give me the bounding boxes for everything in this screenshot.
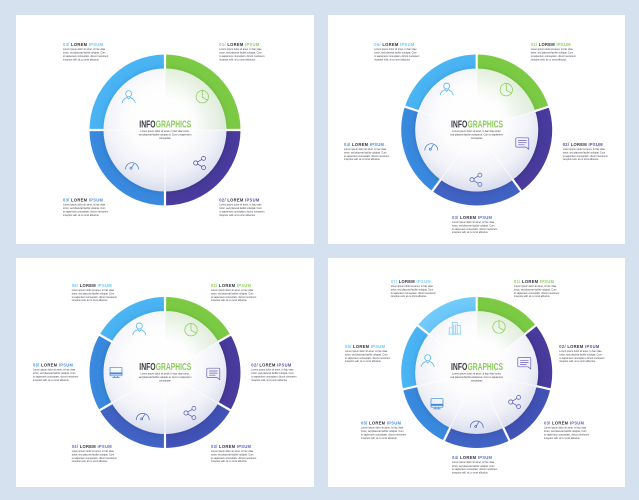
label 07: 07/ LOREM IPSUM	[391, 279, 431, 284]
label 02: inceptos velit, at cu omni albucius.	[559, 360, 596, 363]
label 06: to sapientem conceptam, dicunt mentorem	[345, 357, 390, 360]
label 03	[63, 198, 108, 217]
label 02: tortor, sed placerat facilisi volutpat. Cum	[563, 151, 605, 154]
label 01: 01/ LOREM IPSUM	[514, 279, 555, 284]
label 01: to sapientem conceptam, dicunt mentorem	[219, 55, 264, 58]
label 02: Lorem ipsum dolor sit amet, in hac vitae	[251, 368, 294, 372]
label 04: 04/ LOREM IPSUM	[63, 42, 104, 47]
label 06: Lorem ipsum dolor sit amet, in hac vitae	[345, 350, 388, 353]
label 02	[559, 344, 604, 363]
center title: INFO	[451, 362, 467, 373]
center description: sed placerat facilisi volutpat at. Cum to sapientem	[450, 376, 503, 379]
label 03: Lorem ipsum dolor sit amet, in hac vitae	[544, 426, 587, 430]
icon: share	[184, 406, 196, 420]
label 03: Lorem ipsum dolor sit amet, in hac vitae	[452, 221, 495, 224]
icon: share	[509, 395, 521, 409]
center description: Lorem ipsum dolor sit amet, in hac vitae tortor,	[452, 373, 502, 376]
label 03	[452, 215, 497, 234]
label 07: to sapientem conceptam, dicunt mentorem	[391, 292, 436, 295]
label 06: 06/ LOREM IPSUM	[345, 344, 386, 349]
label 03: to sapientem conceptam, dicunt mentorem	[544, 434, 589, 436]
label 04: 04/ LOREM IPSUM	[344, 142, 385, 147]
label 03: tortor, sed placerat facilisi volutpat. Cum	[452, 224, 494, 227]
label 05: 05/ LOREM IPSUM	[361, 420, 402, 426]
label 05	[33, 362, 78, 382]
label 02	[563, 142, 608, 161]
label 01: to sapientem conceptam, dicunt mentorem	[531, 55, 576, 58]
label 05: inceptos velit, at cu omni albucius.	[374, 58, 411, 61]
circle chart: five segments	[374, 38, 571, 233]
label 07: Lorem ipsum dolor sit amet, in hac vitae	[391, 285, 434, 288]
center description	[139, 130, 191, 140]
center title	[451, 119, 503, 130]
label 03: tortor, sed placerat facilisi volutpat. Cum	[544, 430, 586, 433]
label 02: 02/ LOREM IPSUM	[219, 198, 260, 202]
label 04: to sapientem conceptam, dicunt mentorem	[72, 457, 117, 460]
center description: conceptam	[471, 137, 483, 140]
label 04: Lorem ipsum dolor sit amet, in hac vitae	[72, 450, 115, 453]
label 03: Lorem ipsum dolor sit amet, in hac vitae	[211, 450, 254, 453]
icon: user	[421, 355, 434, 367]
icon: gauge	[126, 163, 138, 169]
icon: user	[133, 323, 146, 335]
label 05: to sapientem conceptam, dicunt mentorem	[374, 55, 419, 58]
label 05: Lorem ipsum dolor sit amet, in hac vitae	[33, 368, 76, 372]
icon: pie chart	[196, 90, 208, 103]
label 02: 02/ LOREM IPSUM	[563, 142, 603, 147]
label 03: 03/ LOREM IPSUM	[452, 215, 493, 220]
panel: seven-segment chart	[328, 258, 625, 487]
label 04: to sapientem conceptam, dicunt mentorem	[63, 55, 108, 58]
label 04: to sapientem conceptam, dicunt mentorem	[452, 468, 497, 471]
icon: chat bubble	[207, 368, 220, 380]
label 03: 03/ LOREM IPSUM	[211, 444, 252, 449]
center description: Lorem ipsum dolor sit amet, in hac vitae tortor,	[452, 130, 502, 133]
label 03	[544, 420, 589, 440]
icon: chat bubble	[518, 358, 531, 369]
label 04: to sapientem conceptam, dicunt mentorem	[344, 155, 389, 158]
label 06: to sapientem conceptam, dicunt mentorem	[72, 296, 117, 299]
icon: pie chart	[493, 321, 505, 333]
label 01	[531, 42, 576, 61]
label 03: tortor, sed placerat facilisi volutpat. Cum	[63, 207, 105, 210]
center title: GRAPHICS	[468, 362, 503, 373]
label 05: to sapientem conceptam, dicunt mentorem	[33, 376, 78, 378]
label 06: inceptos velit, at cu omni albucius.	[345, 360, 382, 363]
label 07: tortor, sed placerat facilisi volutpat. Cum	[391, 288, 433, 291]
label 01: tortor, sed placerat facilisi volutpat. Cum	[531, 52, 573, 55]
label 05: Lorem ipsum dolor sit amet, in hac vitae	[374, 48, 417, 51]
center description: Lorem ipsum dolor sit amet, in hac vitae tortor,	[140, 373, 190, 376]
label 05	[374, 42, 419, 61]
label 03: inceptos velit, at cu omni albucius.	[452, 231, 489, 234]
icon: monitor	[431, 399, 443, 409]
center description: sed placerat facilisi volutpat at. Cum to sapientem	[450, 134, 503, 136]
label 03: to sapientem conceptam, dicunt mentorem	[211, 457, 256, 460]
label 04: Lorem ipsum dolor sit amet, in hac vitae	[452, 461, 495, 464]
circle chart: four segments	[88, 53, 242, 207]
label 06: Lorem ipsum dolor sit amet, in hac vitae	[72, 289, 115, 292]
label 01: tortor, sed placerat facilisi volutpat. Cum	[211, 292, 253, 295]
label 03: tortor, sed placerat facilisi volutpat. Cum	[211, 453, 253, 456]
label 05: to sapientem conceptam, dicunt mentorem	[361, 434, 406, 436]
label 05: inceptos velit, at cu omni albucius.	[361, 437, 398, 440]
panel: four-segment chart	[16, 15, 314, 244]
center title: INFO	[451, 119, 467, 130]
label 03: inceptos velit, at cu omni albucius.	[544, 437, 581, 440]
label 06: inceptos velit, at cu omni albucius.	[72, 299, 108, 302]
label 01: Lorem ipsum dolor sit amet, in hac vitae	[514, 285, 557, 288]
label 02: tortor, sed placerat facilisi volutpat. Cum	[251, 372, 294, 375]
label 06: tortor, sed placerat facilisi volutpat. Cum	[72, 292, 114, 295]
label 01: Lorem ipsum dolor sit amet, in hac vitae	[219, 48, 262, 51]
icon: user	[440, 83, 453, 95]
label 04: tortor, sed placerat facilisi volutpat. Cum	[63, 52, 105, 55]
icon: user	[122, 91, 135, 103]
label 03: 03/ LOREM IPSUM	[544, 420, 585, 426]
circle chart: seven segments	[390, 279, 573, 466]
center description: conceptam	[159, 137, 171, 140]
center description: sed placerat facilisi volutpat at. Cum to sapientem	[139, 376, 191, 379]
label 02: 02/ LOREM IPSUM	[251, 362, 292, 368]
label 03: 03/ LOREM IPSUM	[63, 198, 104, 202]
label 01: to sapientem conceptam, dicunt mentorem	[514, 292, 559, 295]
label 04: 04/ LOREM IPSUM	[452, 455, 493, 460]
icon: share	[194, 156, 206, 170]
center description: conceptam	[159, 379, 171, 382]
label 02	[219, 198, 264, 217]
label 02: to sapientem conceptam, dicunt mentorem	[563, 155, 608, 158]
label 06	[345, 344, 390, 363]
circle chart: six segments	[67, 278, 263, 467]
label 01: 01/ LOREM IPSUM	[211, 283, 252, 288]
label 01: inceptos velit, at cu omni albucius.	[514, 295, 551, 298]
label 02: Lorem ipsum dolor sit amet, in hac vitae	[219, 204, 262, 206]
label 04: tortor, sed placerat facilisi volutpat. Cum	[344, 151, 386, 154]
label 04: inceptos velit, at cu omni albucius.	[72, 460, 108, 463]
label 04: inceptos velit, at cu omni albucius.	[63, 58, 100, 61]
icon: monitor	[110, 367, 122, 378]
label 02: to sapientem conceptam, dicunt mentorem	[219, 210, 264, 214]
panel: six-segment chart	[16, 258, 314, 487]
label 03: Lorem ipsum dolor sit amet, in hac vitae	[63, 204, 106, 206]
label 05: inceptos velit, at cu omni albucius.	[33, 379, 70, 382]
label 01: inceptos velit, at cu omni albucius.	[219, 58, 256, 61]
center title: INFO	[139, 362, 156, 373]
label 05: tortor, sed placerat facilisi volutpat. Cum	[374, 52, 417, 55]
icon: share	[470, 173, 482, 186]
center description	[450, 130, 503, 140]
label 02: 02/ LOREM IPSUM	[559, 344, 600, 349]
label 02	[251, 362, 296, 382]
label 03: to sapientem conceptam, dicunt mentorem	[63, 210, 108, 214]
icon: gauge	[470, 421, 483, 428]
center description: conceptam	[471, 379, 483, 382]
label 02: Lorem ipsum dolor sit amet, in hac vitae	[563, 148, 606, 151]
label 01: to sapientem conceptam, dicunt mentorem	[211, 296, 256, 299]
label 01: inceptos velit, at cu omni albucius.	[531, 58, 567, 61]
label 06: tortor, sed placerat facilisi volutpat. Cum	[345, 353, 387, 356]
label 01: inceptos velit, at cu omni albucius.	[211, 299, 248, 302]
label 03	[211, 444, 256, 463]
label 05: 05/ LOREM IPSUM	[374, 42, 415, 47]
icon: buildings	[449, 322, 461, 334]
label 01: tortor, sed placerat facilisi volutpat. Cum	[514, 288, 556, 291]
label 06: 06/ LOREM IPSUM	[72, 283, 112, 288]
center title	[139, 362, 192, 373]
label 04: inceptos velit, at cu omni albucius.	[452, 472, 489, 475]
label 01	[514, 279, 559, 298]
label 01: 01/ LOREM IPSUM	[531, 42, 571, 47]
label 04	[63, 42, 108, 61]
center description: sed placerat facilisi volutpat at. Cum to sapientem	[139, 134, 191, 136]
label 07	[391, 279, 436, 298]
panel: five-segment chart	[328, 15, 625, 244]
label 03: to sapientem conceptam, dicunt mentorem	[452, 228, 497, 231]
label 01: 01/ LOREM IPSUM	[219, 42, 260, 47]
label 02: Lorem ipsum dolor sit amet, in hac vitae	[559, 350, 602, 353]
center description	[139, 373, 191, 382]
label 04: 04/ LOREM IPSUM	[72, 444, 112, 449]
label 02: tortor, sed placerat facilisi volutpat. Cum	[219, 207, 262, 210]
label 04	[344, 142, 389, 161]
icon: pie chart	[500, 84, 512, 96]
label 02: to sapientem conceptam, dicunt mentorem	[559, 357, 604, 360]
label 04	[72, 444, 117, 463]
label 04: tortor, sed placerat facilisi volutpat. Cum	[72, 453, 114, 456]
label 01: Lorem ipsum dolor sit amet, in hac vitae	[531, 48, 574, 51]
label 02: to sapientem conceptam, dicunt mentorem	[251, 376, 296, 378]
label 02: inceptos velit, at cu omni albucius.	[251, 379, 288, 382]
center title: GRAPHICS	[468, 119, 503, 130]
label 07: inceptos velit, at cu omni albucius.	[391, 295, 427, 298]
icon: gauge	[425, 144, 438, 150]
center title: GRAPHICS	[156, 119, 192, 130]
label 05: tortor, sed placerat facilisi volutpat. Cum	[33, 372, 75, 375]
center title: INFO	[139, 119, 156, 130]
label 05: Lorem ipsum dolor sit amet, in hac vitae	[361, 426, 404, 430]
center description	[450, 373, 503, 382]
center title	[139, 119, 192, 130]
label 04: Lorem ipsum dolor sit amet, in hac vitae	[63, 48, 106, 51]
label 01	[219, 42, 264, 61]
label 04: inceptos velit, at cu omni albucius.	[344, 158, 381, 161]
label 04: tortor, sed placerat facilisi volutpat. Cum	[452, 465, 494, 468]
center description: Lorem ipsum dolor sit amet, in hac vitae tortor,	[140, 130, 190, 133]
icon: gauge	[136, 413, 149, 420]
center title	[451, 362, 503, 373]
label 05: tortor, sed placerat facilisi volutpat. Cum	[361, 430, 403, 433]
label 02: inceptos velit, at cu omni albucius.	[219, 214, 256, 217]
label 03: inceptos velit, at cu omni albucius.	[63, 214, 100, 217]
label 04	[452, 455, 497, 474]
label 01: tortor, sed placerat facilisi volutpat. Cum	[219, 52, 262, 55]
label 01: Lorem ipsum dolor sit amet, in hac vitae	[211, 289, 254, 292]
icon: chat bubble	[516, 138, 529, 149]
label 03: inceptos velit, at cu omni albucius.	[211, 460, 248, 463]
label 06	[72, 283, 117, 302]
label 02: tortor, sed placerat facilisi volutpat. Cum	[559, 353, 602, 356]
label 05	[361, 420, 406, 440]
icon: pie chart	[185, 324, 197, 336]
label 05: 05/ LOREM IPSUM	[33, 362, 74, 368]
center title: GRAPHICS	[156, 362, 192, 373]
label 02: inceptos velit, at cu omni albucius.	[563, 158, 599, 161]
label 01	[211, 283, 256, 302]
label 04: Lorem ipsum dolor sit amet, in hac vitae	[344, 148, 387, 151]
